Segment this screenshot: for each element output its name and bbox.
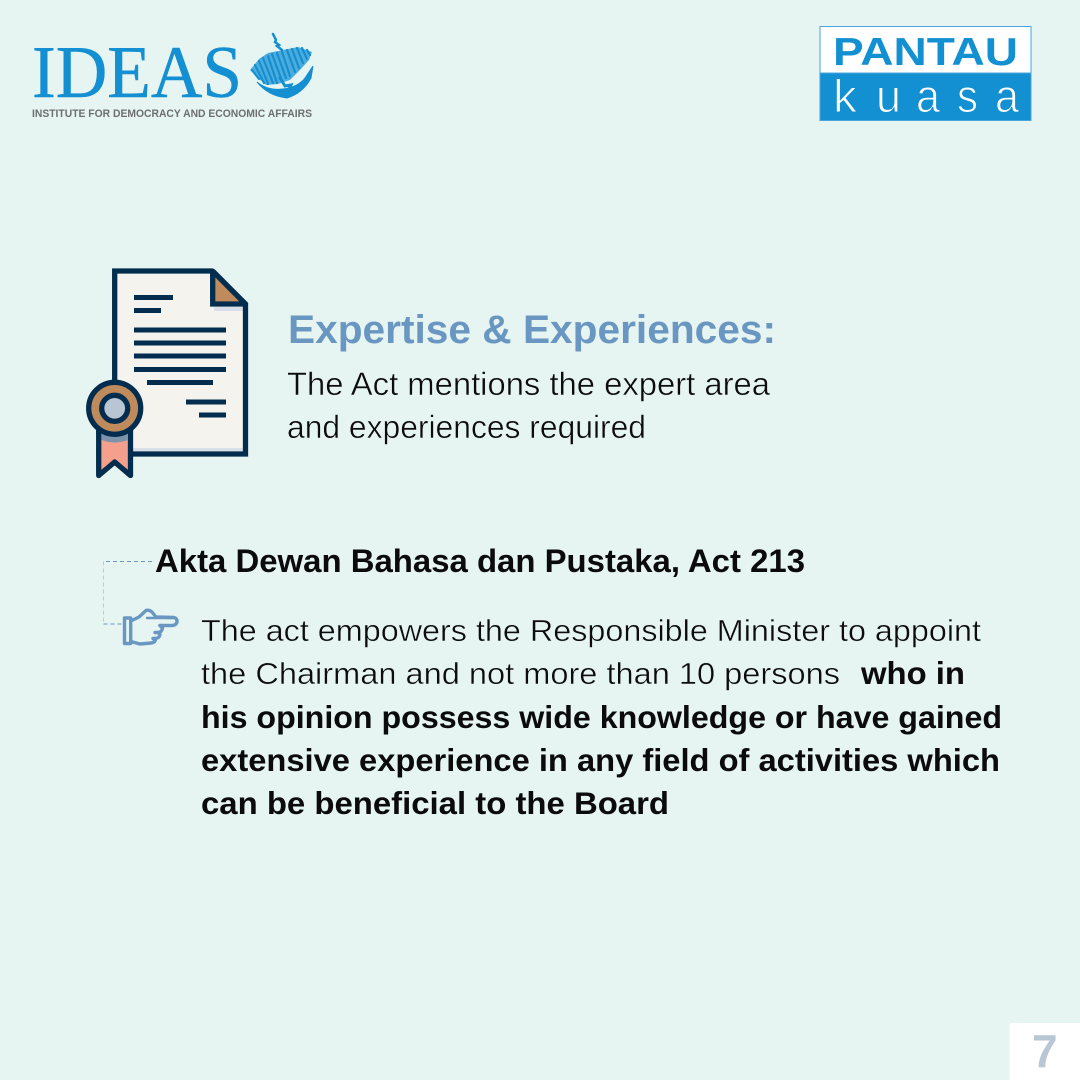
body bold text: his opinion possess wide knowledge or have gained [201, 699, 1002, 735]
icon: certificate document with ribbon seal [89, 271, 246, 476]
logo: IDEAS [32, 32, 313, 120]
dashed connector [104, 562, 152, 624]
logo wordmark: IDEAS [32, 32, 242, 114]
subheading text [287, 366, 770, 445]
page number background [1010, 1023, 1080, 1080]
logo word kuasa: s [957, 70, 978, 122]
icon: pointing hand [124, 610, 177, 644]
folded corner [213, 271, 246, 304]
logo word PANTAU: PANTAU [833, 31, 1018, 74]
heading: Expertise & Experiences: [288, 308, 776, 352]
body regular text [201, 613, 981, 691]
body regular text: The act empowers the Responsible Minister to appoint [201, 613, 981, 648]
logo word kuasa: a [916, 70, 940, 122]
seal [89, 382, 141, 434]
page number [1010, 1023, 1080, 1080]
logo: Pantau Kuasa [820, 26, 1031, 122]
logo bottom panel [820, 73, 1031, 120]
body regular text: the Chairman and not more than 10 persons [201, 656, 840, 691]
logo top panel [820, 26, 1031, 73]
body paragraph [201, 613, 1002, 821]
document page [115, 271, 246, 454]
logo word kuasa: u [876, 70, 901, 122]
body bold text: can be beneficial to the Board [201, 785, 669, 821]
icon: hatched bird [250, 34, 313, 98]
subheading text: The Act mentions the expert area [287, 366, 770, 402]
logo word kuasa: k [833, 70, 858, 122]
body bold text: extensive experience in any field of activities which [201, 742, 1000, 778]
act title: Akta Dewan Bahasa dan Pustaka, Act 213 [155, 543, 805, 579]
logo word kuasa [833, 70, 1019, 122]
document text lines [134, 295, 226, 418]
page number digit: 7 [1032, 1025, 1058, 1077]
ribbon [99, 430, 130, 476]
subheading text: and experiences required [287, 409, 646, 445]
logo tagline: INSTITUTE FOR DEMOCRACY AND ECONOMIC AFFAIRS [32, 108, 312, 120]
logo word kuasa: a [995, 70, 1019, 122]
body bold text: who in [860, 655, 965, 691]
body bold text [201, 655, 1002, 821]
